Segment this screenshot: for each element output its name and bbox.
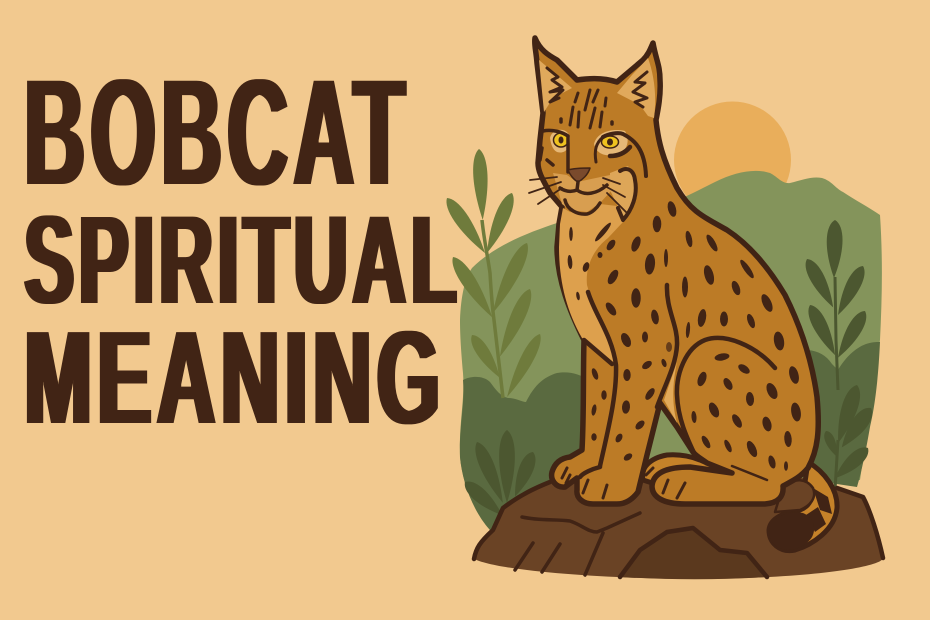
rock xyxy=(473,478,883,579)
plant: lower left sprig xyxy=(460,430,540,521)
fur lines xyxy=(562,285,775,498)
spots xyxy=(567,200,802,471)
face xyxy=(529,68,647,220)
chest fur xyxy=(559,204,623,363)
whiskers xyxy=(529,177,627,213)
toes xyxy=(562,468,685,498)
body and head silhouette xyxy=(535,38,818,504)
eye patches xyxy=(550,130,570,152)
right eye xyxy=(602,136,618,148)
tail xyxy=(769,462,837,551)
plant: right sprig xyxy=(801,220,877,490)
thigh crease xyxy=(732,466,767,480)
far hind foot xyxy=(642,455,732,492)
shoulder line xyxy=(657,285,677,407)
left ear inner xyxy=(539,60,572,112)
right ear inner xyxy=(617,58,655,118)
right cheek ruff xyxy=(610,166,637,219)
title: SPIRITUAL xyxy=(24,189,462,332)
nose xyxy=(568,168,590,182)
haunch arc xyxy=(677,338,775,455)
mouth xyxy=(560,182,607,214)
dark green left hills xyxy=(460,372,640,530)
title xyxy=(24,47,462,453)
facial markings xyxy=(540,68,647,220)
left eye xyxy=(554,133,568,147)
bobcat xyxy=(529,38,837,551)
chest edge and leg line xyxy=(588,292,616,466)
hip highlight xyxy=(664,362,677,423)
muzzle xyxy=(553,173,612,212)
title: BOBCAT xyxy=(24,47,410,218)
rock body xyxy=(473,478,883,579)
background hills xyxy=(460,171,882,530)
plant: left sprig xyxy=(441,149,546,400)
icon: sun xyxy=(674,102,791,218)
rock outline and cracks xyxy=(474,482,883,577)
dark green right hills xyxy=(808,342,880,487)
rock lower facet xyxy=(620,528,767,579)
light green mountain xyxy=(460,171,882,530)
title: MEANING xyxy=(24,302,446,453)
